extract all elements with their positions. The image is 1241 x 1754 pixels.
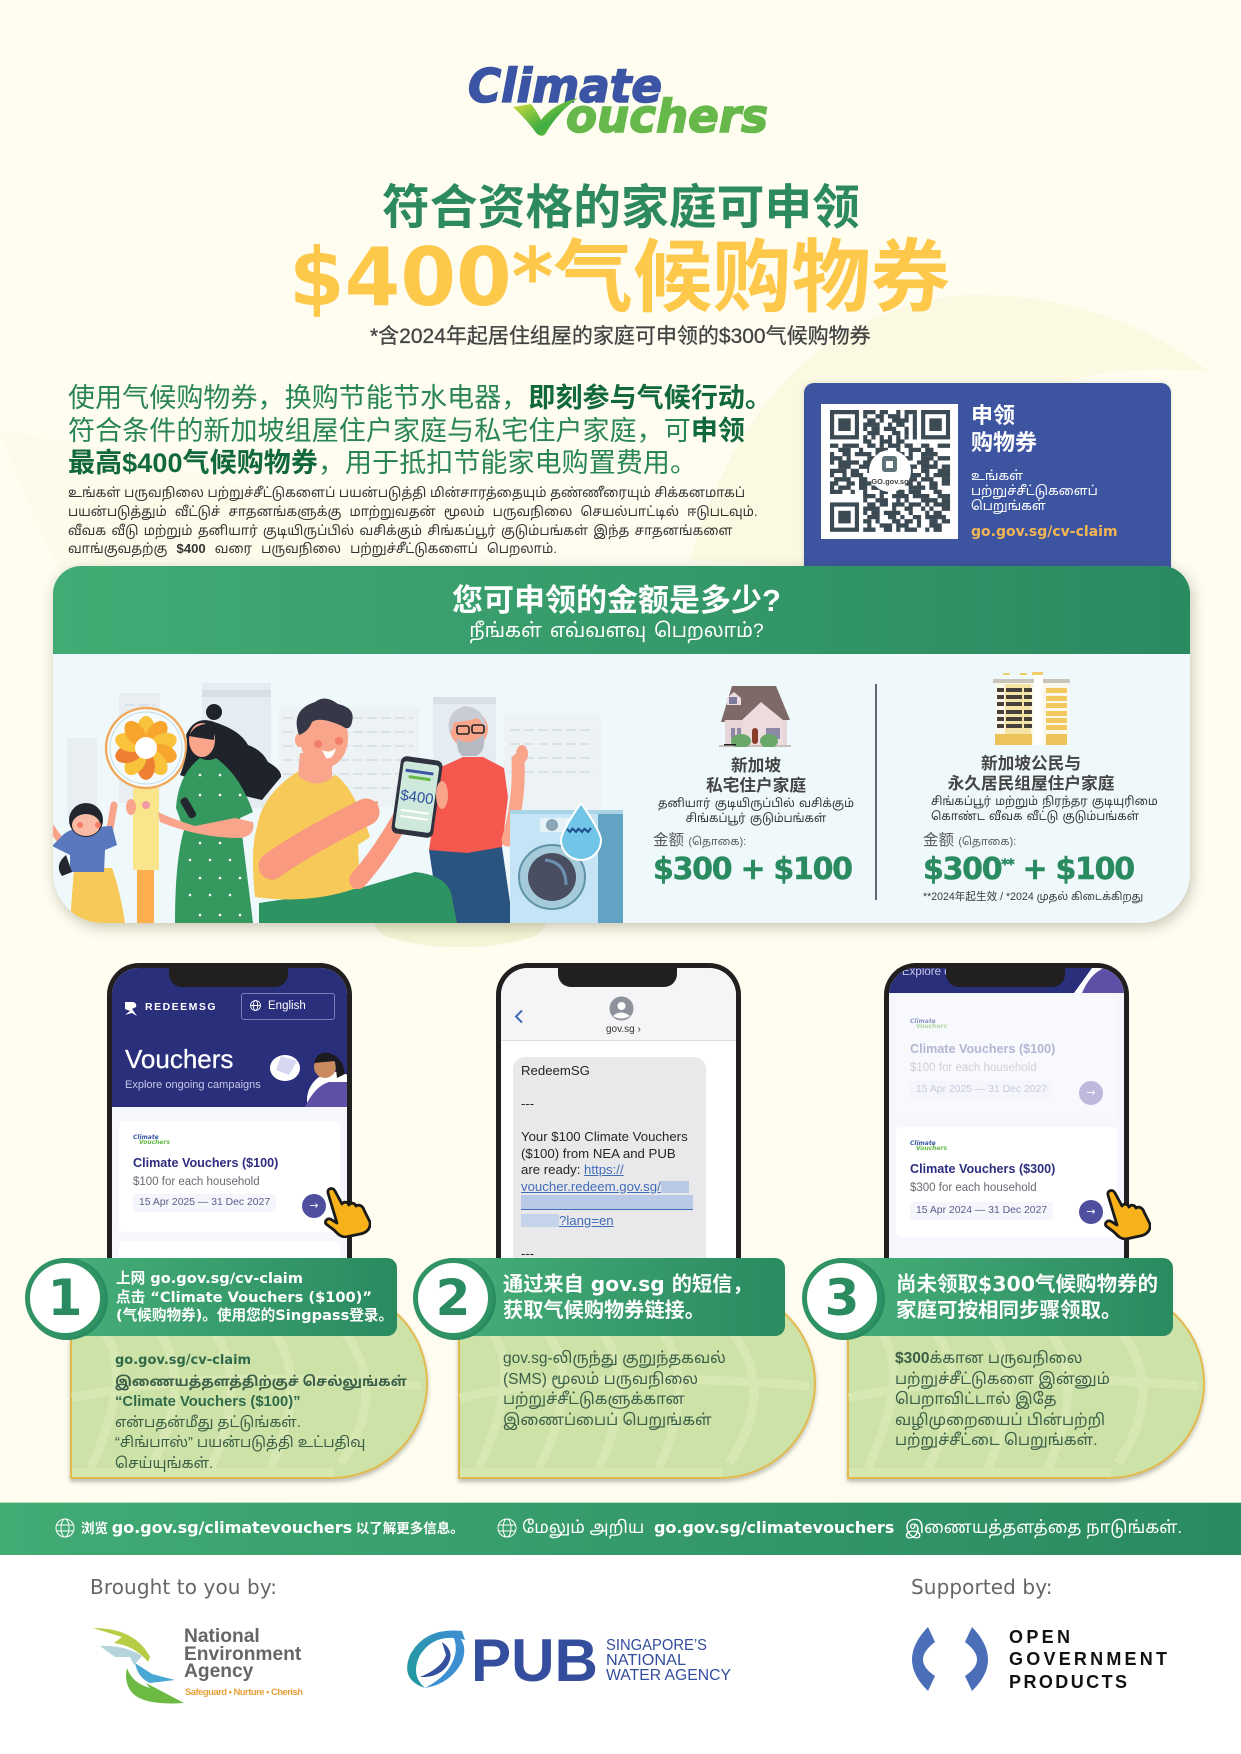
washing machine <box>510 803 623 923</box>
mini logo: Climate <box>133 1134 159 1141</box>
logo: Open Government Products: GOVERNMENT <box>1009 1649 1167 1669</box>
step 2 instruction: 通过来自 gov.sg 的短信， <box>503 1272 753 1296</box>
house amount label: 金额 (தொகை): <box>653 832 746 849</box>
intro Chinese paragraph <box>68 383 772 478</box>
arrow button: → <box>309 1199 319 1212</box>
SMS text <box>521 1063 693 1260</box>
step number 1: 1 <box>48 1269 82 1327</box>
divider between household types <box>875 684 877 900</box>
icon: house <box>719 686 791 747</box>
icon: HDB flat block <box>993 672 1070 745</box>
step 2 Tamil instructions: gov.sg-லிருந்து குறுந்தகவல் <box>503 1350 726 1367</box>
QR Tamil text: உங்கள் <box>971 468 1023 483</box>
HDB Tamil text <box>931 795 1158 824</box>
logo: National Environment Agency: Safeguard • Nurture • Cherish <box>185 1686 303 1697</box>
brought to you by label: Brought to you by: <box>90 1575 277 1599</box>
step 1 Tamil instructions: என்பதன்மீது தட்டுங்கள். <box>115 1415 301 1431</box>
phone showing $400: $400 <box>399 787 435 808</box>
logo: Open Government Products <box>905 1620 1175 1700</box>
intro Chinese paragraph: 使用气候购物券，换购节能节水电器，即刻参与气候行动。 <box>68 383 772 413</box>
step 1 Tamil instructions: go.gov.sg/cv-claim <box>115 1353 251 1368</box>
mini logo <box>133 1134 170 1146</box>
date pill: 15 Apr 2024 — 31 Dec 2027 <box>916 1205 1047 1216</box>
panel header band <box>53 566 1190 654</box>
contact name: gov.sg › <box>606 1024 641 1035</box>
step 2 instruction <box>503 1272 753 1322</box>
child <box>40 803 125 923</box>
step 1 instruction <box>116 1270 393 1324</box>
app header illustration <box>270 1052 347 1107</box>
mini logo: Vouchers <box>916 1144 947 1152</box>
step 3 Tamil instructions: பெறாவிட்டால் இதே <box>895 1391 1057 1408</box>
icon: globe <box>56 1518 74 1538</box>
SMS bubble <box>513 1057 706 1272</box>
HDB heading: 新加坡公民与 <box>981 754 1081 773</box>
logo: Climate Vouchers <box>468 60 768 143</box>
step 2 phone <box>496 963 741 1268</box>
step number 2 <box>413 1258 493 1338</box>
house Tamil text: சிங்கப்பூர் குடும்பங்கள் <box>686 813 826 825</box>
QR code <box>821 404 958 539</box>
footer white area <box>0 1555 1241 1754</box>
phone notch <box>169 968 288 987</box>
logo: National Environment Agency: Agency <box>184 1661 254 1682</box>
scrolled app header <box>889 968 1124 993</box>
Vouchers title: Vouchers <box>125 1044 233 1074</box>
phone notch <box>558 968 677 987</box>
HDB Tamil text: கொண்ட வீவக வீட்டு குடும்பங்கள் <box>931 811 1139 823</box>
SMS text: Your $100 Climate Vouchers <box>521 1129 688 1144</box>
Chinese website line: 浏览 go.gov.sg/climatevouchers 以了解更多信息。 <box>81 1518 464 1537</box>
logo: PUB: WATER AGENCY <box>606 1667 731 1684</box>
intro Tamil paragraph: வீவக வீடு மற்றும் தனியார் குடியிருப்பில் வசிக்கும் சிங்கப்பூர் குடும்பங்கள் இந்த சாதனங்களை <box>68 523 733 538</box>
step shapes with leaf pattern <box>68 1312 1208 1484</box>
HDB heading: 永久居民组屋住户家庭 <box>948 774 1114 793</box>
arrow button <box>302 1194 326 1218</box>
step 2 Tamil instructions: (SMS) மூலம் பருவநிலை <box>503 1371 698 1388</box>
fan <box>106 708 186 923</box>
card title: Climate Vouchers ($300) <box>910 1162 1055 1176</box>
step 1 phone <box>107 963 352 1268</box>
logo: PUB: PUB <box>471 1627 598 1694</box>
HDB heading <box>948 754 1114 793</box>
icon: pointing hand 3 <box>1104 1189 1151 1240</box>
title line 1: 符合资格的家庭可申领 <box>382 182 860 235</box>
intro Chinese paragraph: 最高$400气候购物券，用于抵扣节能家电购置费用。 <box>68 448 697 478</box>
house Tamil text <box>658 797 854 826</box>
intro Tamil paragraph <box>68 485 758 558</box>
card subtitle: $100 for each household <box>133 1176 260 1188</box>
logo: Climate Vouchers: Climate <box>468 60 662 113</box>
faded card title: Climate Vouchers ($100) <box>910 1042 1055 1056</box>
step 3 Tamil instructions: பற்றுச்சீட்டை பெறுங்கள். <box>895 1432 1098 1449</box>
QR code: GO.gov.sg <box>871 477 909 486</box>
house heading: 私宅住户家庭 <box>706 776 806 795</box>
mini logo <box>910 1140 947 1152</box>
step 1 Tamil instructions: “சிங்பாஸ்” பயன்படுத்தி உட்பதிவு <box>115 1435 365 1451</box>
house amount: $300 + $100 <box>653 852 852 887</box>
SMS text: ?lang=en <box>559 1212 614 1228</box>
step 3 instruction: 尚未领取$300气候购物券的 <box>896 1272 1158 1296</box>
illustration: family with appliances <box>53 683 623 923</box>
arrow button <box>1079 1200 1103 1224</box>
step 1 Tamil instructions <box>115 1353 407 1472</box>
icon: globe in selector <box>250 1000 261 1011</box>
language selector <box>241 993 335 1020</box>
QR heading <box>971 403 1037 455</box>
HDB amount: $300** + $100 <box>923 852 1134 887</box>
logo: National Environment Agency <box>90 1620 310 1710</box>
logo: National Environment Agency: Environment <box>184 1644 302 1665</box>
mini logo: Vouchers <box>139 1138 170 1146</box>
logo: PUB: SINGAPORE’S <box>606 1637 707 1654</box>
language selector: English <box>268 1000 306 1012</box>
step 3 banner <box>841 1258 1173 1336</box>
panel: how much can you claim <box>53 566 1190 923</box>
intro text block <box>68 383 772 558</box>
title line 2: $400*气候购物券 <box>289 231 950 324</box>
QR heading: 购物券 <box>971 430 1037 455</box>
SMS text: are ready: https:// <box>521 1162 624 1177</box>
step 3 Tamil instructions: $300க்கான பருவநிலை <box>895 1350 1082 1367</box>
step 3 phone <box>884 963 1129 1268</box>
illustration skyline <box>67 683 601 818</box>
arrow button: → <box>1086 1205 1096 1218</box>
cut-off subtitle: Explore c <box>902 966 950 978</box>
faded mini logo: Climate <box>910 1018 936 1025</box>
HDB amount label: 金额 (தொகை): <box>923 832 1016 849</box>
QR Tamil text <box>971 468 1098 514</box>
old man in red shirt <box>429 706 528 923</box>
step 2 Tamil instructions: இணைப்பைப் பெறுங்கள் <box>503 1412 712 1429</box>
subtitle footnote: *含2024年起居住组屋的家庭可申领的$300气候购物券 <box>370 325 871 348</box>
step 1 instruction: (气候购物券)。使用您的Singpass登录。 <box>116 1307 393 1324</box>
icon: pointing hand 1 <box>324 1187 371 1238</box>
faded mini logo: Vouchers <box>916 1022 947 1030</box>
step 1 Tamil instructions: செய்யுங்கள். <box>115 1456 213 1472</box>
icon: globe <box>498 1518 516 1538</box>
SMS text: --- <box>521 1246 534 1260</box>
faded card subtitle: $100 for each household <box>910 1062 1037 1074</box>
QR heading: 申领 <box>971 403 1015 428</box>
date pill <box>133 1194 276 1212</box>
voucher card <box>119 1121 340 1232</box>
intro Tamil paragraph: வாங்குவதற்கு $400 வரை பருவநிலை பற்றுச்சீட்டுகளைப் பெறலாம். <box>68 541 557 556</box>
icon: back chevron <box>514 1010 523 1024</box>
icon: contact avatar <box>610 996 634 1020</box>
panel sub heading: நீங்கள் எவ்வளவு பெறலாம்? <box>469 620 764 642</box>
SMS text: RedeemSG <box>521 1063 590 1078</box>
logo: PUB: NATIONAL <box>606 1652 686 1669</box>
HDB Tamil text: சிங்கப்பூர் மற்றும் நிரந்தர குடியுரிமை <box>931 796 1158 808</box>
step 3 Tamil instructions <box>895 1350 1110 1450</box>
HDB footnote: **2024年起生效 / *2024 முதல் கிடைக்கிறது <box>923 891 1143 903</box>
date pill <box>910 1202 1053 1220</box>
intro Tamil paragraph: உங்கள் பருவநிலை பற்றுச்சீட்டுகளைப் பயன்படுத்தி மின்சாரத்தையும் தண்ணீரையும் சிக்கனமாகப் <box>68 485 745 500</box>
phone showing $400 <box>391 755 443 839</box>
step 3 instruction: 家庭可按相同步骤领取。 <box>896 1298 1122 1322</box>
second voucher card <box>119 1241 340 1301</box>
step 3 Tamil instructions: வழிமுறையைப் பின்பற்றி <box>895 1412 1105 1429</box>
website band <box>0 1502 1241 1555</box>
app subtitle: Explore ongoing campaigns <box>125 1079 261 1091</box>
SMS text: voucher.redeem.gov.sg/ <box>521 1178 661 1194</box>
house heading <box>706 756 806 795</box>
app header <box>112 968 347 1107</box>
step 2 Tamil instructions: பற்றுச்சீட்டுகளுக்கான <box>503 1391 685 1408</box>
woman in green dress <box>126 704 281 923</box>
RedeemSG brand: REDEEMSG <box>145 1001 217 1013</box>
house heading: 新加坡 <box>731 756 781 775</box>
SMS text: ($100) from NEA and PUB <box>521 1146 676 1160</box>
step 1 Tamil instructions: இணையத்தளத்திற்குச் செல்லுங்கள் <box>115 1374 407 1389</box>
mini logo: Climate <box>910 1140 936 1147</box>
QR Tamil text: பற்றுச்சீட்டுகளைப் <box>971 483 1098 498</box>
supported by label: Supported by: <box>911 1575 1053 1599</box>
QR URL: go.gov.sg/cv-claim <box>971 524 1118 540</box>
step number 2: 2 <box>436 1269 470 1327</box>
intro Chinese paragraph: 符合条件的新加坡组屋住户家庭与私宅住户家庭，可申领 <box>68 416 745 446</box>
house Tamil text: தனியார் குடியிருப்பில் வசிக்கும் <box>658 798 854 810</box>
Tamil website line: மேலும் அறிய go.gov.sg/climatevouchers இணையத்தளத்தை நாடுங்கள். <box>522 1518 1182 1537</box>
step 1 instruction: 点击 “Climate Vouchers ($100)” <box>116 1288 372 1306</box>
faded arrow button <box>1079 1081 1103 1105</box>
step 1 instruction: 上网 go.gov.sg/cv-claim <box>116 1270 303 1287</box>
logo: Open Government Products: PRODUCTS <box>1009 1672 1127 1692</box>
step 2 banner <box>453 1258 785 1336</box>
phone notch <box>946 968 1065 987</box>
step 2 instruction: 获取气候购物券链接。 <box>503 1298 705 1322</box>
panel heading: 您可申领的金额是多少? <box>452 583 781 618</box>
step 3 instruction <box>896 1272 1158 1322</box>
panel: QR claim card <box>804 383 1171 578</box>
icon: RedeemSG mark <box>125 1002 137 1016</box>
logo: National Environment Agency: National <box>184 1626 260 1647</box>
step number 1 <box>25 1258 105 1338</box>
step 1 banner <box>65 1258 397 1336</box>
scrolled header illustration <box>1074 968 1124 993</box>
logo: Open Government Products: OPEN <box>1009 1627 1070 1647</box>
faded mini logo <box>910 1018 947 1030</box>
voucher card <box>896 1127 1117 1237</box>
step 2 Tamil instructions <box>503 1350 726 1430</box>
logo: PUB <box>400 1620 740 1700</box>
faded arrow button: → <box>1086 1086 1096 1099</box>
SMS header <box>501 968 736 1041</box>
card subtitle: $300 for each household <box>910 1182 1037 1194</box>
QR Tamil text: பெறுங்கள் <box>971 498 1046 513</box>
faded voucher card <box>896 995 1117 1119</box>
faded date pill <box>910 1081 1053 1099</box>
date pill: 15 Apr 2025 — 31 Dec 2027 <box>139 1197 270 1208</box>
intro Tamil paragraph: பயன்படுத்தும் வீட்டுச் சாதனங்களுக்கு மாற்றுவதன் மூலம் பருவநிலை செயல்பாட்டில் ஈடுபடவும். <box>68 504 758 519</box>
water efficiency drop label <box>561 803 601 860</box>
man with yellow shirt <box>253 698 457 923</box>
logo: Climate Vouchers: ouchers <box>566 90 768 143</box>
step 1 Tamil instructions: “Climate Vouchers ($100)” <box>115 1394 301 1410</box>
step 3 Tamil instructions: பற்றுச்சீட்டுகளை இன்னும் <box>895 1371 1110 1388</box>
card title: Climate Vouchers ($100) <box>133 1156 278 1170</box>
faded date pill: 15 Apr 2025 — 31 Dec 2027 <box>916 1084 1047 1095</box>
step number 3 <box>802 1258 882 1338</box>
SMS text: --- <box>521 1096 534 1111</box>
step number 3: 3 <box>825 1269 859 1327</box>
